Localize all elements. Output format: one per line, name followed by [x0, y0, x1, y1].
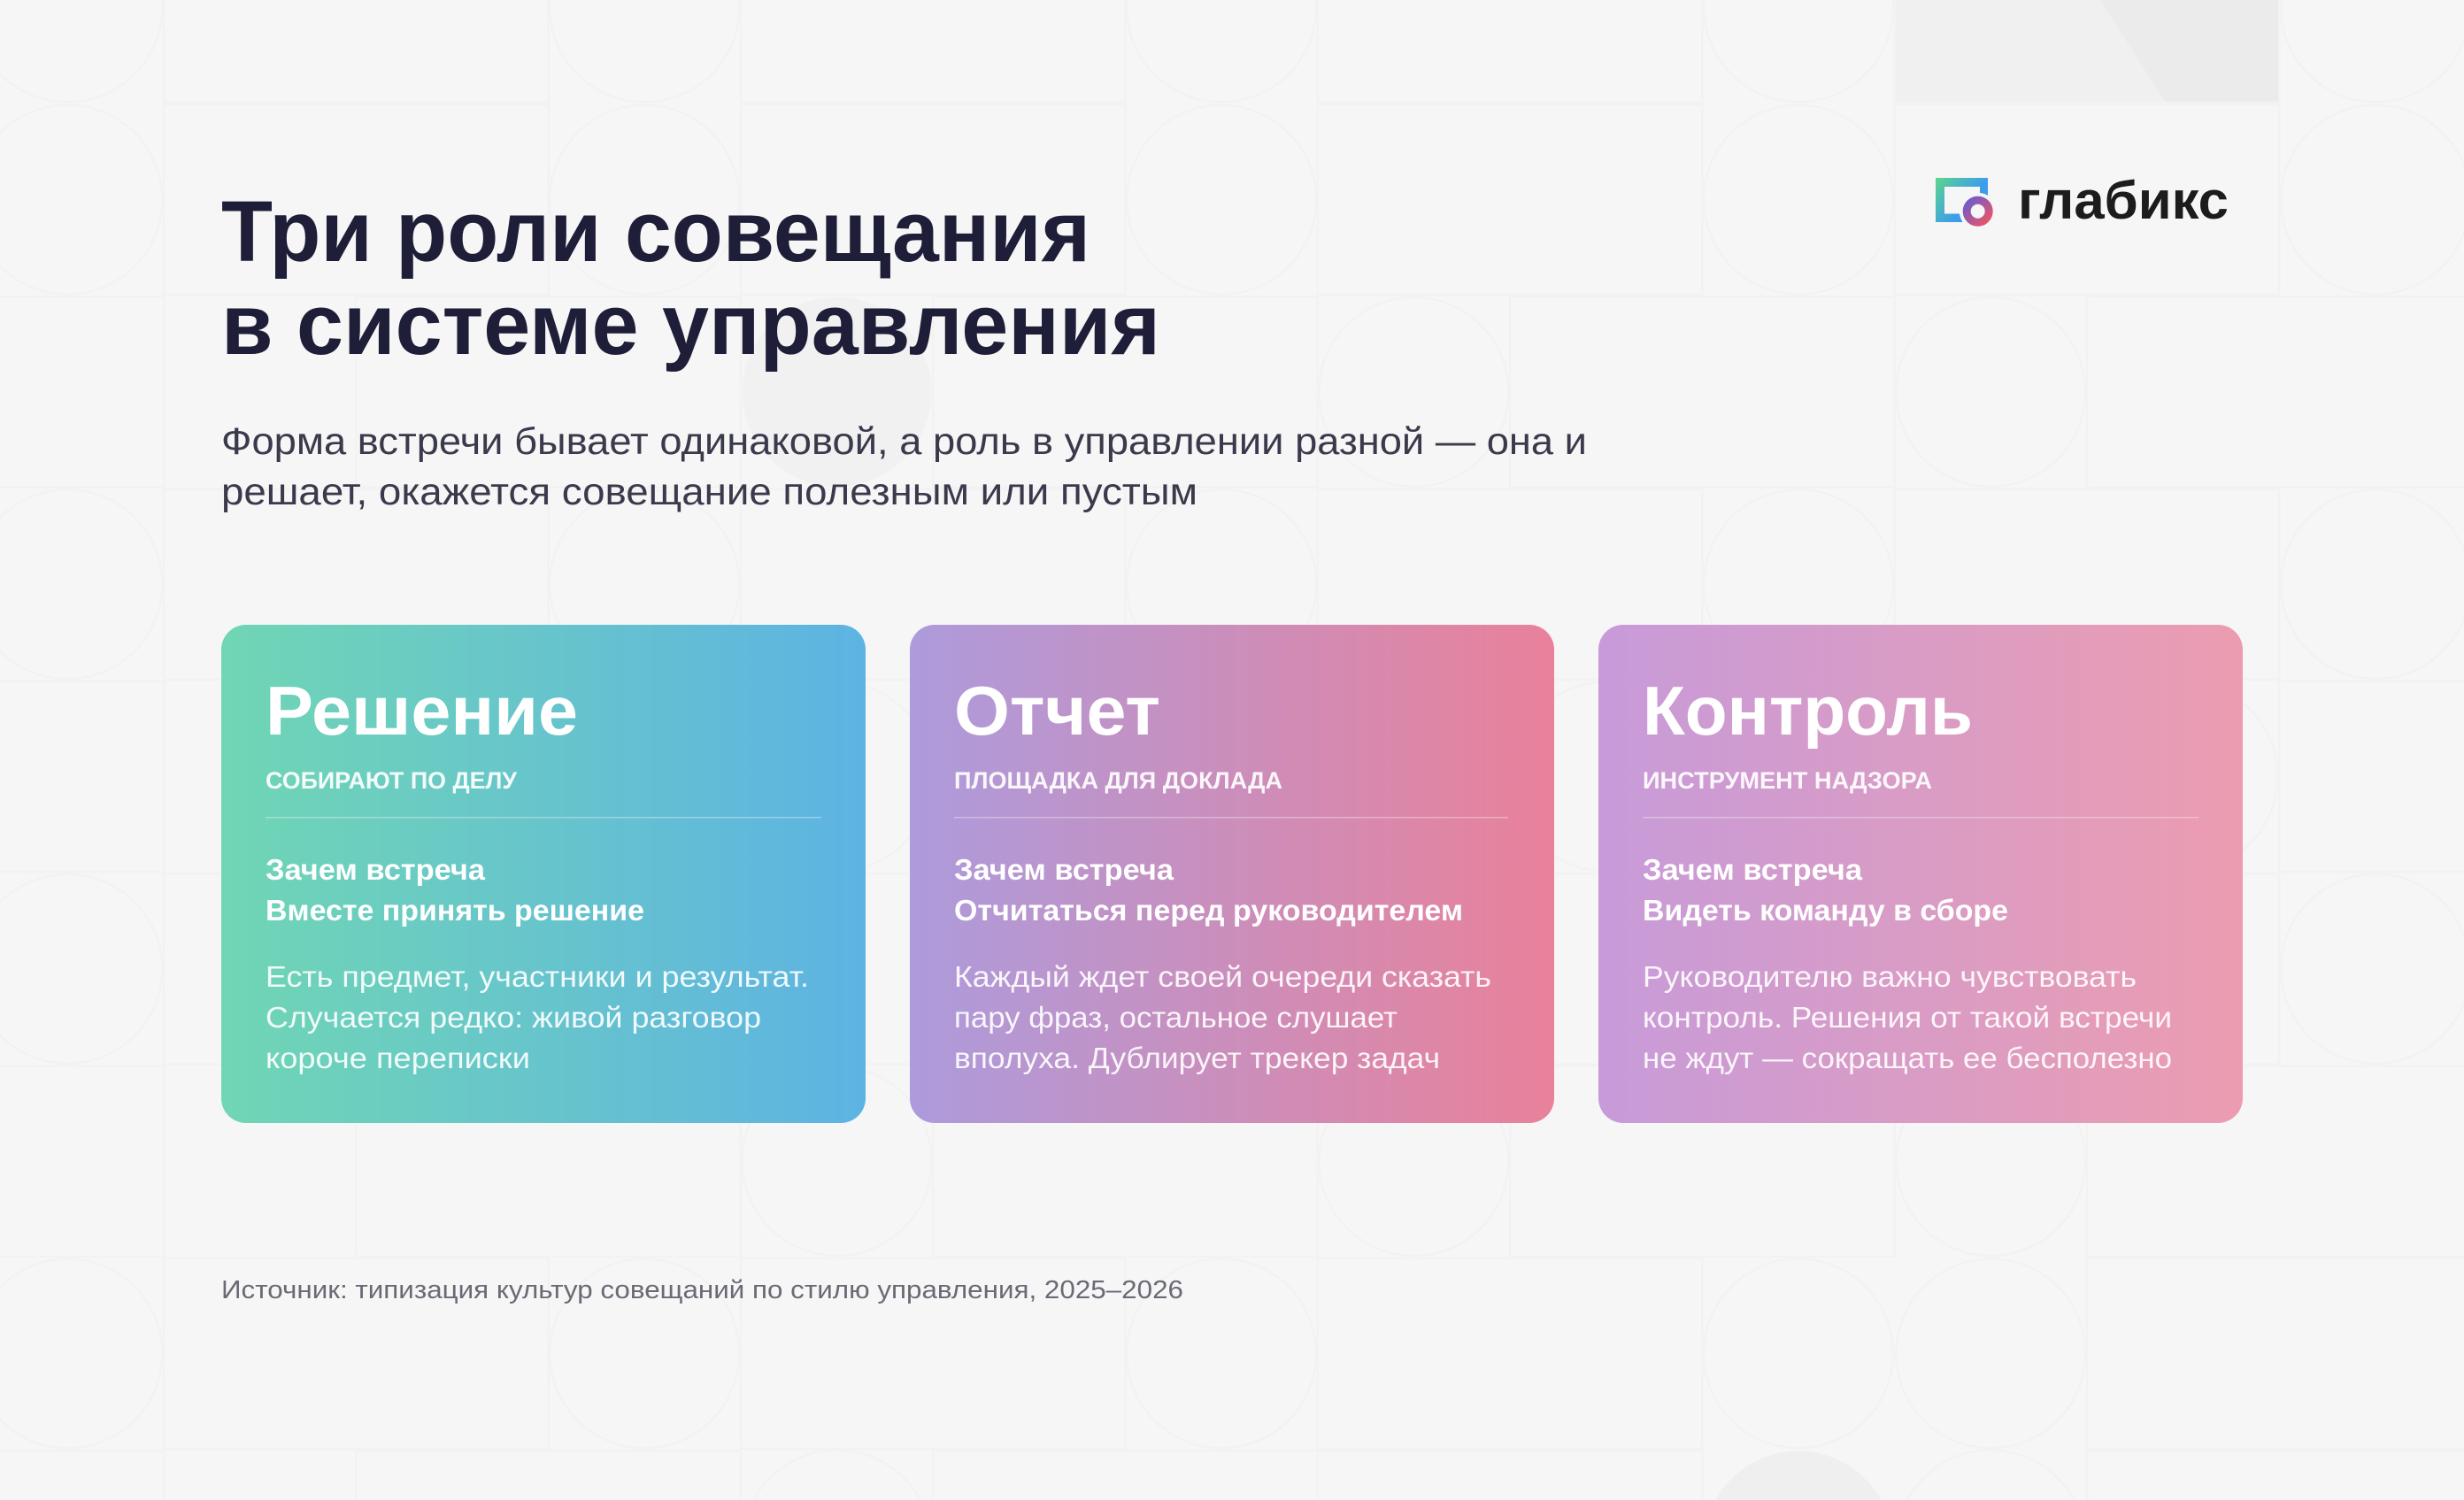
- description: Руководителю важно чувствовать: [1643, 960, 2137, 993]
- panel: Отчет: [910, 625, 1554, 1123]
- card tagline: ПЛОЩАДКА ДЛЯ ДОКЛАДА: [954, 767, 1282, 794]
- card heading: Отчет: [954, 672, 1160, 750]
- purpose: [1643, 853, 2008, 927]
- purpose: Видеть команду в сборе: [1643, 894, 2008, 927]
- purpose: Вместе принять решение: [266, 894, 644, 927]
- card tagline: СОБИРАЮТ ПО ДЕЛУ: [266, 767, 518, 794]
- description: не ждут — сокращать ее бесполезно: [1643, 1042, 2172, 1074]
- description: короче переписки: [266, 1042, 530, 1074]
- description: [1643, 960, 2172, 1074]
- subtitle: решает, окажется совещание полезным или пустым: [221, 471, 1197, 513]
- subtitle: Форма встречи бывает одинаковой, а роль в управлении разной — она и: [221, 420, 1587, 463]
- panel: Контроль: [1598, 625, 2243, 1123]
- description: пару фраз, остальное слушает: [954, 1001, 1398, 1034]
- source note: Источник: типизация культур совещаний по стилю управления, 2025–2026: [221, 1276, 1183, 1304]
- title: Три роли совещания: [221, 183, 1090, 280]
- title: [221, 183, 1160, 373]
- logo: [1936, 171, 2229, 230]
- card tagline: ИНСТРУМЕНТ НАДЗОРА: [1643, 767, 1932, 794]
- panel: Решение: [221, 625, 866, 1123]
- description: [266, 960, 809, 1074]
- logo wordmark: глабикс: [2018, 171, 2229, 230]
- description: Каждый ждет своей очереди сказать: [954, 960, 1491, 993]
- purpose: Зачем встреча: [1643, 853, 1863, 886]
- purpose: Отчитаться перед руководителем: [954, 894, 1463, 927]
- card heading: Контроль: [1643, 672, 1973, 750]
- description: Случается редко: живой разговор: [266, 1001, 761, 1034]
- description: контроль. Решения от такой встречи: [1643, 1001, 2172, 1034]
- purpose: [954, 853, 1463, 927]
- title: в системе управления: [221, 276, 1160, 373]
- icon: logo mark: [1936, 178, 1997, 230]
- purpose: Зачем встреча: [266, 853, 486, 886]
- card heading: Решение: [266, 672, 578, 750]
- description: вполуха. Дублирует трекер задач: [954, 1042, 1440, 1074]
- purpose: Зачем встреча: [954, 853, 1174, 886]
- purpose: [266, 853, 644, 927]
- description: Есть предмет, участники и результат.: [266, 960, 809, 993]
- description: [954, 960, 1491, 1074]
- subtitle: [221, 420, 1587, 513]
